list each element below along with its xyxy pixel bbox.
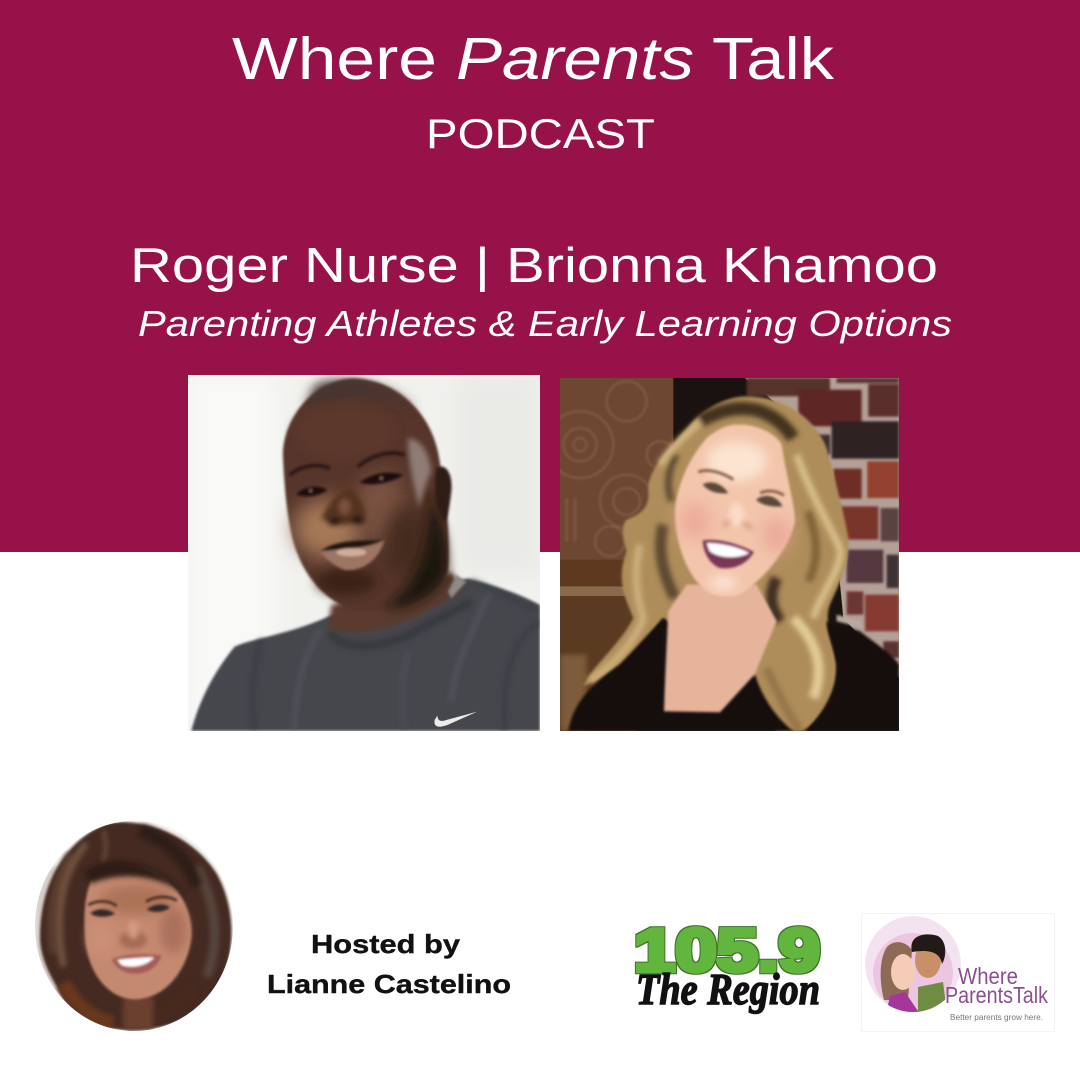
head xyxy=(283,378,449,611)
photo: Brionna Khamoo xyxy=(547,378,899,731)
tin panel xyxy=(560,378,673,561)
face xyxy=(84,867,192,999)
photo: host Lianne Castelino xyxy=(33,818,237,1035)
episode topic: Parenting Athletes & Early Learning Options xyxy=(138,303,952,344)
host credit xyxy=(267,929,511,999)
logo: 105.9 The Region: 105.9 xyxy=(634,917,820,984)
panel: crimson header banner xyxy=(0,0,1080,552)
host credit: Lianne Castelino xyxy=(267,969,511,999)
logo: Where Parents Talk: Where xyxy=(958,963,1018,989)
hair xyxy=(40,822,232,1030)
eyes and brows xyxy=(698,471,784,507)
neck xyxy=(328,572,465,633)
wood paneling xyxy=(560,560,625,586)
guest names: Roger Nurse | Brionna Khamoo xyxy=(130,239,938,293)
title: Parents xyxy=(456,26,694,92)
neck xyxy=(123,997,153,1030)
mouth xyxy=(112,954,162,974)
host credit: Hosted by xyxy=(311,929,461,959)
eyes and brows xyxy=(290,453,405,496)
title: Talk xyxy=(712,26,835,92)
logo: Where Parents Talk: ParentsTalk xyxy=(945,982,1048,1008)
face xyxy=(675,425,795,597)
icon: parents illustration xyxy=(865,916,961,1014)
logo: 105.9 The Region xyxy=(634,917,820,1014)
icon: swoosh xyxy=(434,712,477,727)
nose xyxy=(119,931,147,949)
ear xyxy=(435,467,452,522)
mouth xyxy=(703,540,754,568)
chest xyxy=(664,585,777,712)
photo: Roger Nurse xyxy=(188,375,541,731)
logo: Where Parents Talk: Better parents grow here. xyxy=(950,1013,1043,1022)
title: Where xyxy=(232,26,437,92)
hair xyxy=(583,396,848,731)
nose xyxy=(723,503,752,530)
logo: Where Parents Talk xyxy=(862,914,1054,1032)
black top xyxy=(568,618,793,731)
title xyxy=(232,26,835,92)
nose xyxy=(321,488,366,525)
eyes and brows xyxy=(88,897,177,917)
brick wall xyxy=(745,378,899,678)
mouth xyxy=(320,540,385,570)
subtitle: podcast: PODCAST xyxy=(426,110,655,157)
shirt xyxy=(191,578,540,731)
logo: 105.9 The Region: The Region xyxy=(636,965,820,1014)
